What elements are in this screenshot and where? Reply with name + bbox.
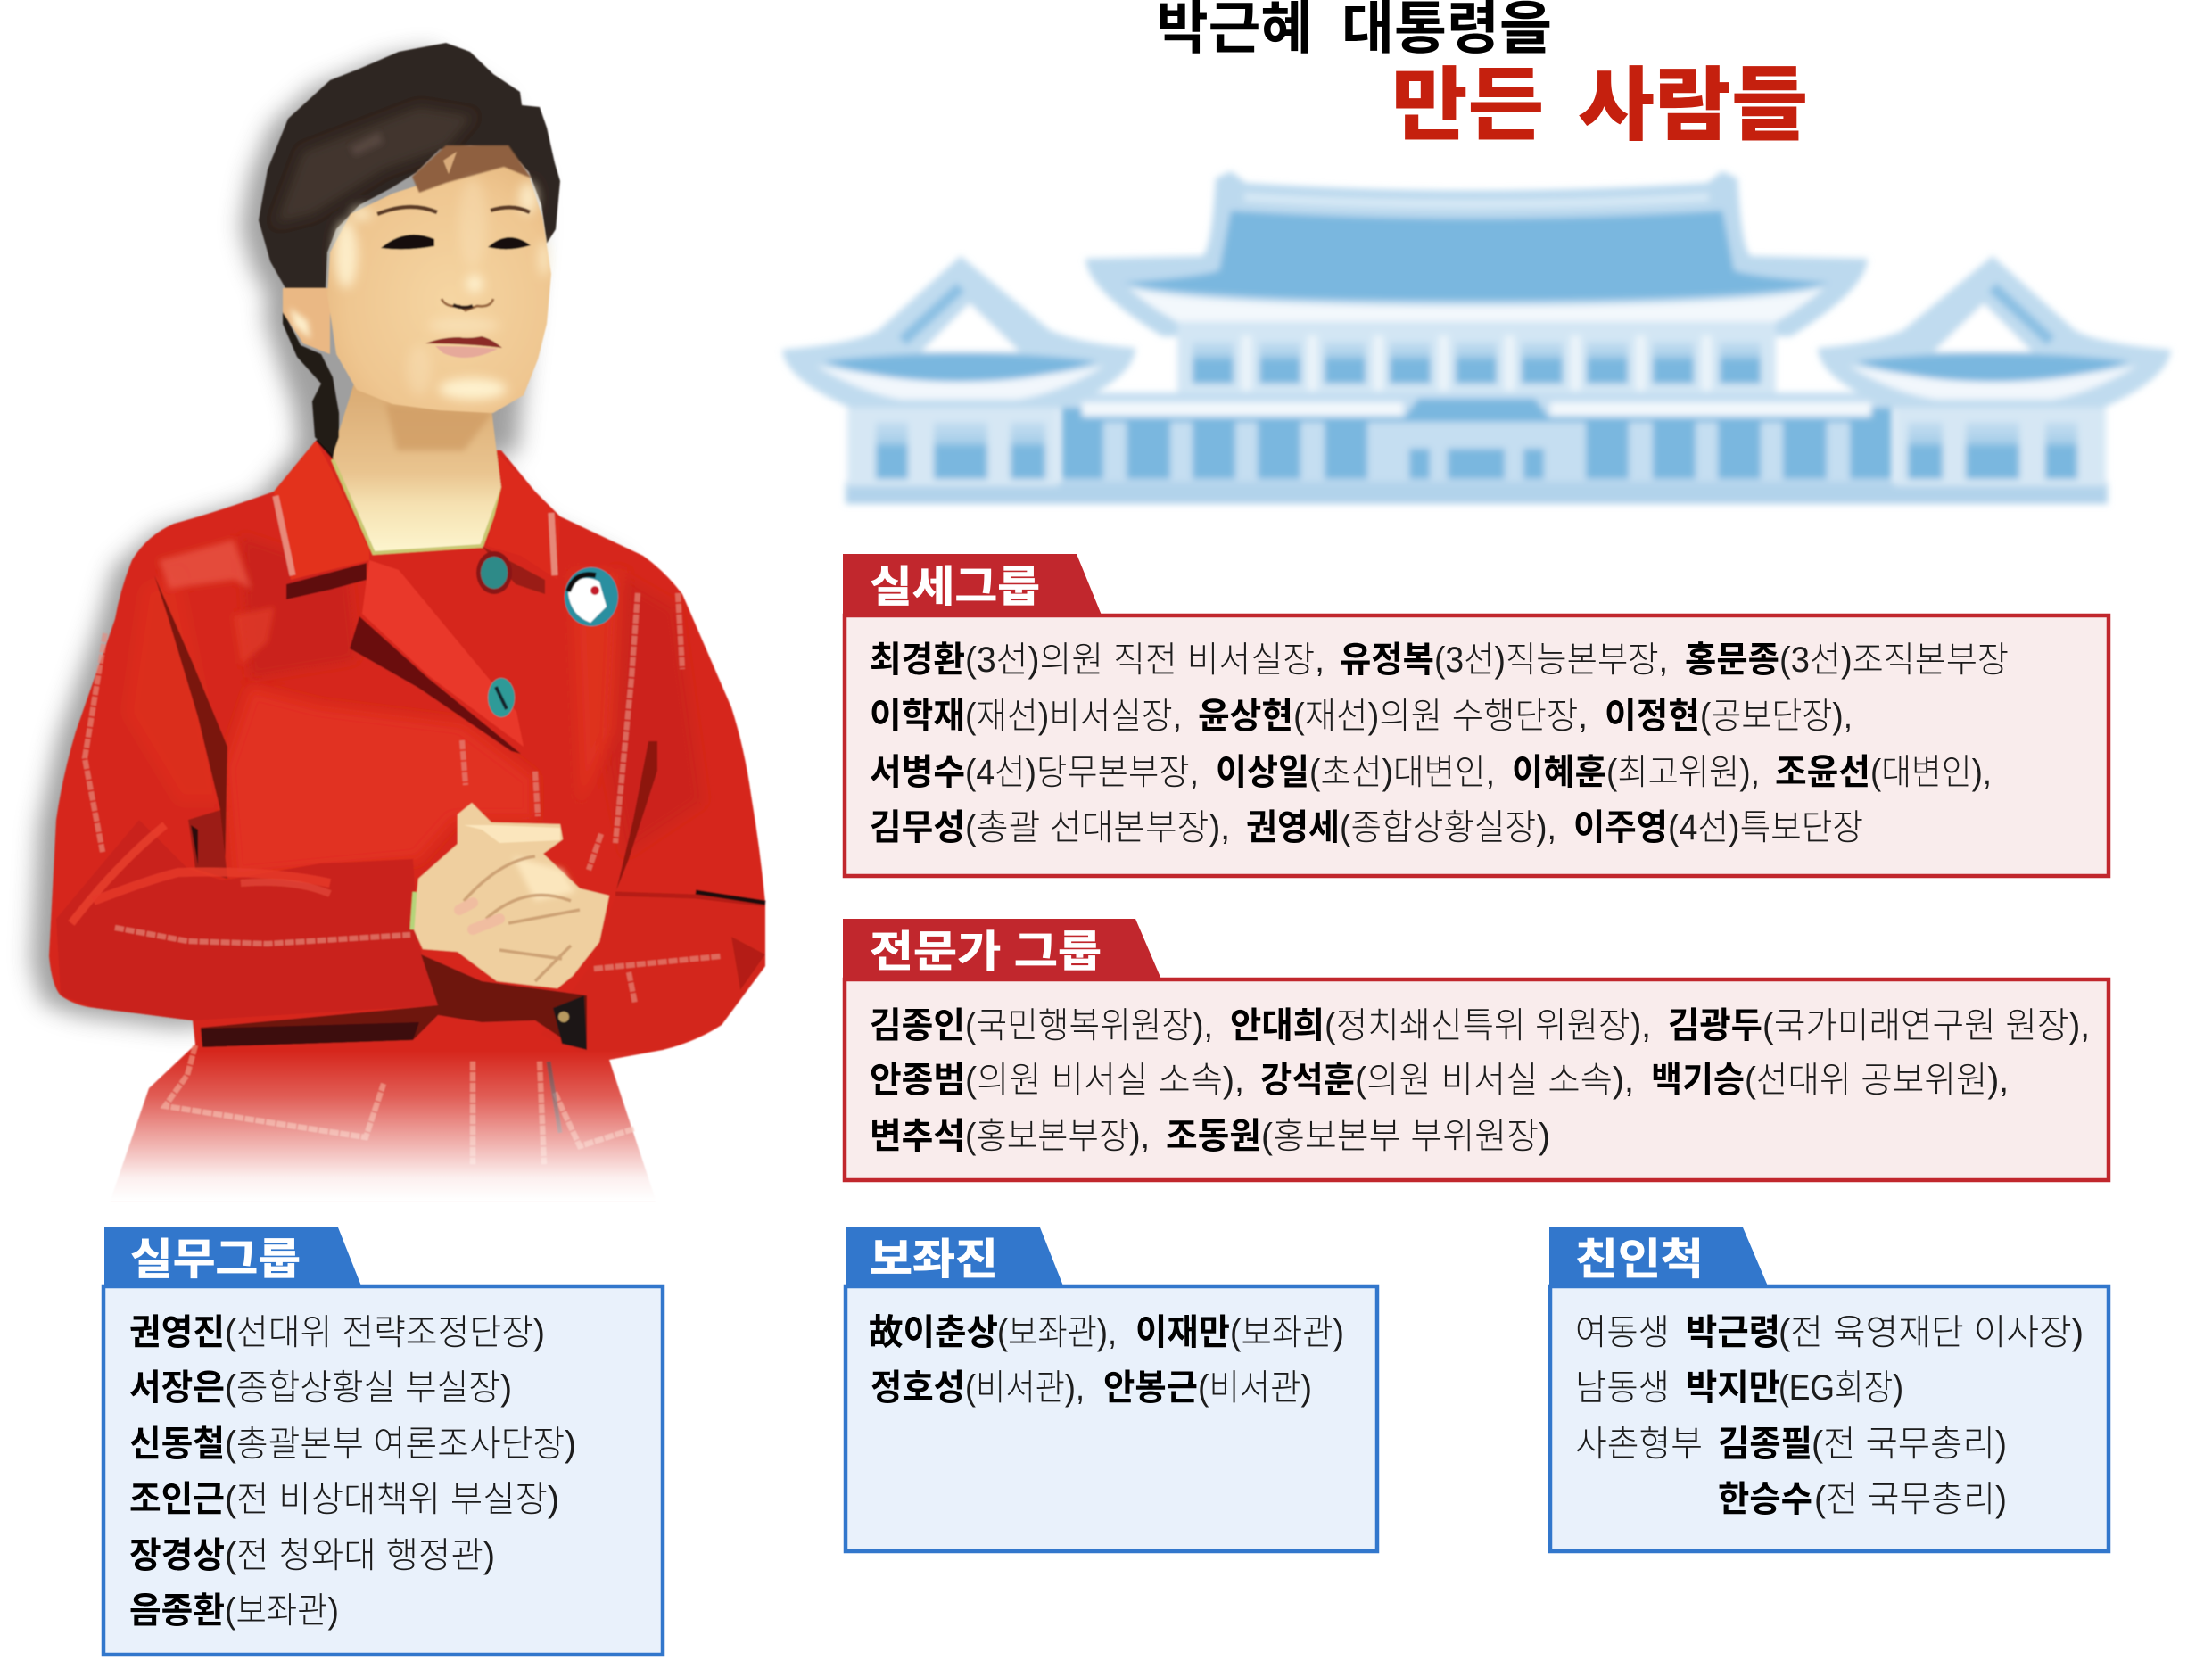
icon: blurred blue palace (Blue House) xyxy=(782,171,2171,504)
panel box xyxy=(103,1286,663,1655)
text block: members: (4선)특보단장 xyxy=(1668,808,1863,847)
text block: members: 권영진 xyxy=(129,1313,225,1352)
skirt stitching xyxy=(165,1045,635,1164)
text block: members: (3선)직능본부장, xyxy=(1434,640,1668,680)
text block: members: 안봉근 xyxy=(1103,1368,1198,1408)
text block: members: (보좌관) xyxy=(1230,1313,1344,1352)
heading tab xyxy=(1549,1227,1769,1288)
text block: members xyxy=(1575,1313,2084,1519)
heading tab xyxy=(846,1227,1064,1288)
text block: members: 김종필 xyxy=(1718,1425,1812,1464)
text block: members xyxy=(870,640,2009,847)
text block: members: (총괄 선대본부장), xyxy=(965,808,1230,847)
text block: members: (최고위원), xyxy=(1606,753,1760,792)
text block: members: 이정현 xyxy=(1605,697,1700,736)
text block: members: 정호성 xyxy=(871,1368,965,1408)
panel: 친인척 xyxy=(1549,1227,2109,1551)
heading tab xyxy=(843,919,1162,981)
text block: members: (선대위 공보위원), xyxy=(1745,1061,2009,1100)
text block: members: (전 비상대책위 부실장) xyxy=(225,1480,559,1519)
collar and lapel xyxy=(316,426,508,486)
text block: members: 이재만 xyxy=(1135,1313,1230,1352)
neck xyxy=(332,375,501,553)
text block: members: (보좌관), xyxy=(997,1313,1117,1352)
panel box xyxy=(1550,1286,2109,1551)
text block: members: 박근령 xyxy=(1686,1313,1780,1352)
text block: members: (총괄본부 여론조사단장) xyxy=(225,1425,576,1464)
text block: members: (재선)비서실장, xyxy=(965,697,1182,736)
text block: members: 유정복 xyxy=(1340,640,1434,680)
text block: members: 이혜훈 xyxy=(1512,753,1606,792)
panel: 보좌진 xyxy=(846,1227,1377,1551)
text block: members: (전 육영재단 이사장) xyxy=(1779,1313,2084,1352)
text block: members: (3선)의원 직전 비서실장, xyxy=(965,640,1325,680)
text block: members: 사촌형부 xyxy=(1575,1425,1703,1464)
jacket xyxy=(49,441,765,1200)
heading tab: 실세그룹 xyxy=(870,564,1040,611)
left pavilion xyxy=(782,256,1135,486)
forearm sleeve xyxy=(56,820,438,1020)
text block: members: 남동생 xyxy=(1575,1368,1670,1408)
text block: members: 김무성 xyxy=(870,808,965,847)
text block: members: 신동철 xyxy=(129,1425,225,1464)
heading tab: 실무그룹 xyxy=(130,1236,301,1284)
text block: members: (재선)의원 수행단장, xyxy=(1293,697,1588,736)
text block: members: 조윤선 xyxy=(1775,753,1870,792)
text block: members: 김종인 xyxy=(870,1006,965,1045)
text block: members: 故이춘상 xyxy=(869,1313,998,1352)
panel: 실무그룹 xyxy=(103,1227,663,1655)
text block: members: 최경환 xyxy=(870,640,965,680)
portrait shadow xyxy=(31,50,625,1028)
right pavilion xyxy=(1818,256,2171,486)
face xyxy=(327,163,551,413)
title: second line in red: 만든 xyxy=(1391,62,1544,151)
right crease xyxy=(616,741,657,890)
panel: 실세그룹 xyxy=(843,554,2109,876)
text block: members: 이학재 xyxy=(870,697,965,736)
text block: members: 한승수 xyxy=(1718,1480,1812,1519)
hair xyxy=(259,43,560,288)
text block: members: 안대희 xyxy=(1230,1006,1325,1045)
text block: members: 박지만 xyxy=(1686,1368,1780,1408)
text block: members: 조인근 xyxy=(129,1480,225,1519)
text block: members xyxy=(869,1313,1344,1408)
text block: members: 권영세 xyxy=(1246,808,1340,847)
portrait: woman in red jacket xyxy=(31,43,794,1201)
text block: members: (국가미래연구원 원장), xyxy=(1762,1006,2090,1045)
text block: members: (비서관) xyxy=(1198,1368,1312,1408)
text block: members: 음종환 xyxy=(129,1591,225,1631)
text block: members: (전 청와대 행정관) xyxy=(225,1536,495,1575)
panel box xyxy=(845,615,2109,876)
panel box xyxy=(845,979,2109,1180)
text block: members: (4선)당무본부장, xyxy=(965,753,1199,792)
heading tab: 친인척 xyxy=(1575,1236,1704,1284)
text block: members: 윤상현 xyxy=(1198,697,1293,736)
text block: members: (초선)대변인, xyxy=(1309,753,1495,792)
jacket stitching xyxy=(85,593,682,944)
text block: members: (종합상황실장), xyxy=(1340,808,1556,847)
title: first line xyxy=(1156,0,1552,61)
text block: members xyxy=(129,1313,576,1631)
heading tab: 보좌진 xyxy=(870,1236,998,1284)
brooches and button xyxy=(476,551,512,594)
text block: members: 안종범 xyxy=(870,1061,965,1100)
heading tab: 전문가 그룹 xyxy=(870,929,1102,976)
text block: members xyxy=(870,1006,2090,1156)
title: second line in red: 사람들 xyxy=(1578,62,1808,151)
text block: members: (공보단장), xyxy=(1700,697,1853,736)
right cuff xyxy=(541,894,765,1053)
text block: members: (보좌관) xyxy=(225,1591,339,1631)
text block: members: 홍문종 xyxy=(1685,640,1779,680)
text block: members: 변추석 xyxy=(870,1117,965,1156)
text block: members: (대변인), xyxy=(1870,753,1992,792)
text block: members: (종합상황실 부실장) xyxy=(225,1368,512,1408)
text block: members: 여동생 xyxy=(1575,1313,1670,1352)
title: second line in red xyxy=(1391,62,1808,151)
heading tab xyxy=(104,1227,362,1288)
face highlights xyxy=(334,178,549,400)
text block: members: (전 국무총리) xyxy=(1814,1480,2007,1519)
text block: members: (홍보본부장), xyxy=(965,1117,1150,1156)
facial features xyxy=(377,207,531,358)
text block: members: 서장은 xyxy=(129,1368,225,1408)
dark belt and shadow under hands xyxy=(201,954,587,1050)
text block: members: 서병수 xyxy=(870,753,965,792)
text block: members: 이상일 xyxy=(1216,753,1309,792)
text block: members: (정치쇄신특위 위원장), xyxy=(1325,1006,1651,1045)
text block: members: (의원 비서실 소속), xyxy=(965,1061,1244,1100)
text block: members: (EG회장) xyxy=(1779,1368,1903,1408)
text block: members: 김광두 xyxy=(1668,1006,1762,1045)
sleeve creases xyxy=(154,575,227,879)
text block: members: (홍보본부 부위원장) xyxy=(1261,1117,1550,1156)
text block: members: 장경상 xyxy=(129,1536,225,1575)
heading tab xyxy=(843,554,1102,617)
text block: members: (전 국무총리) xyxy=(1812,1425,2007,1464)
ear xyxy=(283,288,330,354)
text block: members: 이주영 xyxy=(1573,808,1668,847)
text block: members: 강석훈 xyxy=(1260,1061,1355,1100)
clasped hands xyxy=(413,803,609,988)
text block: members: (의원 비서실 소속), xyxy=(1355,1061,1634,1100)
text block: members: 조동원 xyxy=(1166,1117,1261,1156)
text block: members: (3선)조직본부장 xyxy=(1779,640,2009,680)
lower hair xyxy=(283,310,339,455)
text block: members: (비서관), xyxy=(965,1368,1085,1408)
panel: 전문가 그룹 xyxy=(843,919,2109,1180)
text block: members: 백기승 xyxy=(1651,1061,1745,1100)
lower fade xyxy=(36,1051,794,1201)
text block: members: (선대위 전략조정단장) xyxy=(225,1313,545,1352)
text block: members: (국민행복위원장), xyxy=(965,1006,1213,1045)
panel box xyxy=(846,1286,1377,1551)
